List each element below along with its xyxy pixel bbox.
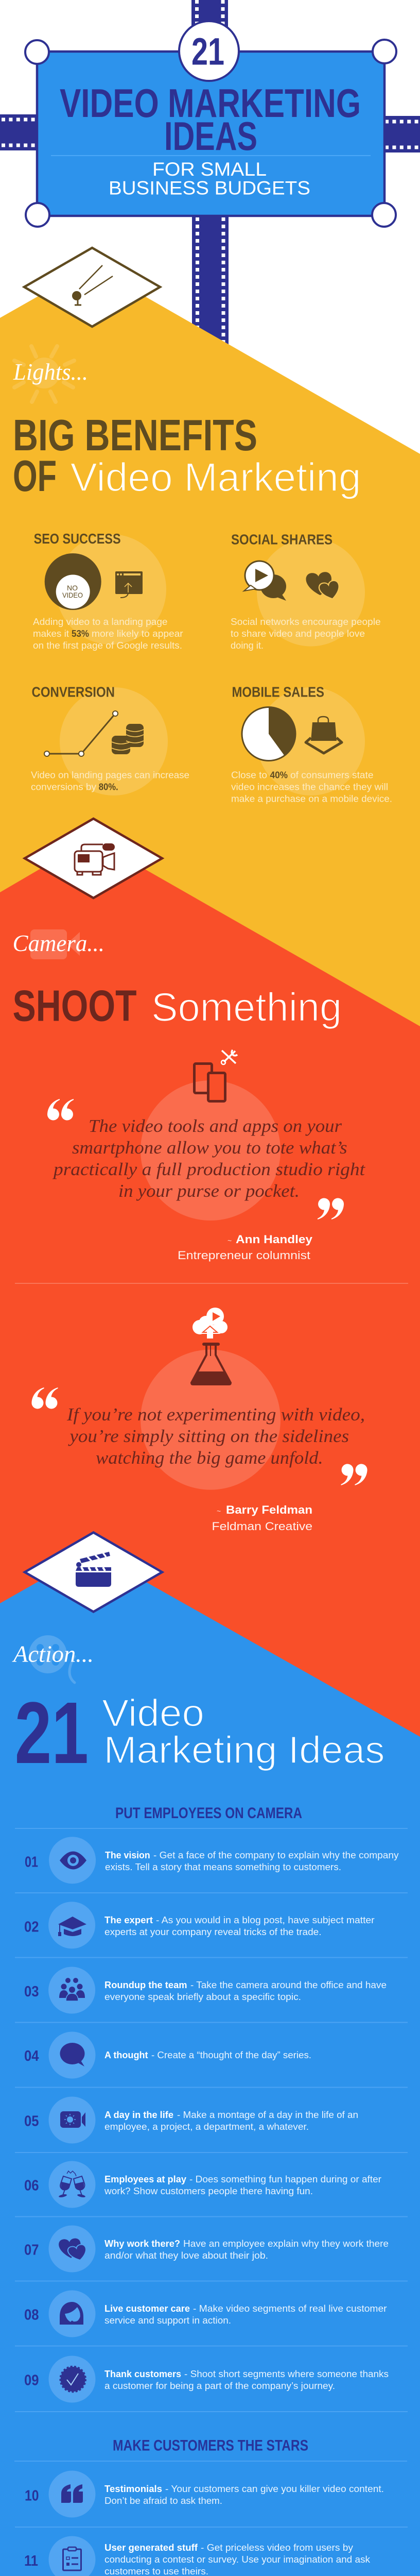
section label: Lights: Lights... xyxy=(13,359,88,385)
idea 03: - Take the camera around the office and have xyxy=(190,1980,387,1990)
icon: lab flask xyxy=(190,1343,232,1385)
idea 07: Why work there? xyxy=(104,2239,180,2249)
idea 09 xyxy=(24,2355,389,2403)
description: video increases the chance they will xyxy=(231,782,388,792)
heading: SOCIAL SHARES xyxy=(231,532,332,548)
idea 04: A thought xyxy=(104,2050,148,2060)
attribution: ~ xyxy=(217,1507,221,1515)
panel: quote by Barry Feldman xyxy=(31,1308,367,1533)
title line two: IDEAS xyxy=(164,113,257,159)
idea 02: experts at your company reveal tricks of the trade. xyxy=(104,1927,321,1937)
heading: 21 video marketing ideas: Video xyxy=(102,1692,204,1734)
subtitle line one: FOR SMALL xyxy=(152,159,267,180)
idea 11: conducting a contest or survey. Use your imagination and ask xyxy=(104,2554,371,2565)
film strip: right xyxy=(381,116,420,152)
idea 02: 02 xyxy=(24,1919,39,1935)
panel: conversion xyxy=(31,684,189,795)
description xyxy=(33,617,183,651)
idea 10: - Your customers can give you killer video content. xyxy=(165,2484,384,2494)
idea 06 xyxy=(24,2161,381,2208)
subheading: put employees on camera: PUT EMPLOYEES ON CAMERA xyxy=(115,1805,302,1822)
idea 02: The expert xyxy=(104,1915,153,1925)
idea 02 xyxy=(24,1902,375,1948)
icon: closing quote mark xyxy=(318,1198,344,1219)
idea 03: 03 xyxy=(24,1984,39,2000)
heading: CONVERSION xyxy=(32,684,115,700)
idea 08: - Make video segments of real live customer xyxy=(193,2303,387,2314)
quote text xyxy=(52,1116,365,1201)
heading: MOBILE SALES xyxy=(232,684,324,700)
icon: video camera with sun xyxy=(60,2111,85,2128)
quote text: you’re simply sitting on the sidelines xyxy=(68,1426,349,1446)
attribution: Feldman Creative xyxy=(212,1520,312,1533)
icon: speech bubble xyxy=(60,2043,84,2066)
description: makes it xyxy=(33,629,69,639)
panel: blue action section xyxy=(0,1551,420,2576)
idea 03 xyxy=(24,1967,387,2013)
film strip: vertical xyxy=(191,0,229,355)
heading: big benefits: BIG BENEFITS xyxy=(13,411,257,460)
icon: video chat bubbles xyxy=(244,561,286,601)
idea 03: everyone speak briefly about a specific topic. xyxy=(104,1992,301,2002)
description xyxy=(231,770,392,804)
idea 10: 10 xyxy=(25,2488,39,2504)
attribution xyxy=(178,1233,313,1262)
title number: 21 xyxy=(191,30,224,73)
quote text: smartphone allow you to tote what’s xyxy=(72,1138,347,1158)
idea 11 xyxy=(24,2536,371,2576)
icon: hearts xyxy=(58,2238,89,2262)
icon: pie chart 40 percent xyxy=(242,707,295,760)
quote text: If you’re not experimenting with video, xyxy=(66,1404,365,1425)
description: Close to xyxy=(231,770,267,781)
icon: hearts xyxy=(305,571,342,601)
subheading: make customers the stars: MAKE CUSTOMERS THE STARS xyxy=(113,2437,308,2454)
idea 09: - Shoot short segments where someone thanks xyxy=(184,2369,389,2379)
icon: cloud video upload xyxy=(192,1308,227,1338)
icon: opening quote mark xyxy=(47,1099,74,1120)
idea 11: - Get priceless video from users by xyxy=(201,2543,353,2553)
subtitle line two: BUSINESS BUDGETS xyxy=(109,177,310,199)
icon: light stand diamond xyxy=(24,248,160,327)
attribution: Entrepreneur columnist xyxy=(178,1249,310,1262)
heading: 21 video marketing ideas: Marketing Ideas xyxy=(104,1728,385,1771)
idea 05: A day in the life xyxy=(104,2110,173,2120)
idea 02: - As you would in a blog post, have subject matter xyxy=(156,1915,375,1925)
idea 04: 04 xyxy=(24,2048,39,2064)
panel: orange camera section xyxy=(0,839,420,1741)
icon: coin stacks xyxy=(112,724,144,754)
idea 09: 09 xyxy=(24,2372,39,2389)
idea 08: Live customer care xyxy=(104,2303,190,2314)
idea 07: and/or what they love about their job. xyxy=(104,2250,268,2261)
idea 05: employee, a project, a department, a whatever. xyxy=(104,2122,309,2132)
quote text: in your purse or pocket. xyxy=(118,1181,300,1201)
heading: big benefits: Video Marketing xyxy=(70,454,361,500)
icon: browser upload xyxy=(115,571,143,598)
quote text: practically a full production studio right xyxy=(52,1159,365,1179)
quote text: watching the big game unfold. xyxy=(96,1448,323,1468)
idea 09: a customer for being a part of the company’s journey. xyxy=(104,2381,335,2391)
heading: SEO SUCCESS xyxy=(34,531,121,547)
description xyxy=(231,617,381,651)
idea 11: 11 xyxy=(24,2553,38,2569)
description: of consumers state xyxy=(290,770,374,781)
attribution: ~ xyxy=(227,1236,232,1245)
icon: rising line chart xyxy=(44,711,118,756)
idea 08: 08 xyxy=(24,2307,39,2324)
idea 05: 05 xyxy=(24,2113,39,2130)
idea 06: work? Show customers people there having fun. xyxy=(104,2186,313,2196)
panel: social shares xyxy=(231,532,381,651)
icon: graduation cap xyxy=(58,1917,86,1936)
section label: Action: Action... xyxy=(12,1640,94,1667)
icon: no video circle xyxy=(45,553,101,610)
section label: Camera: Camera... xyxy=(12,930,104,956)
heading: big benefits xyxy=(13,411,361,501)
attribution: Barry Feldman xyxy=(226,1503,312,1516)
quote text xyxy=(66,1404,365,1468)
idea 07 xyxy=(24,2226,389,2272)
heading: shoot something: SHOOT xyxy=(12,982,137,1031)
idea 04: - Create a “thought of the day” series. xyxy=(151,2050,311,2060)
quote text: The video tools and apps on your xyxy=(89,1116,342,1136)
idea 05 xyxy=(24,2097,358,2143)
attribution: Ann Handley xyxy=(236,1233,313,1246)
heading: shoot something xyxy=(12,982,342,1031)
icon: team xyxy=(59,1978,85,2001)
idea 05: - Make a montage of a day in the life of an xyxy=(177,2110,358,2120)
icon: tools xyxy=(221,1050,237,1064)
description: doing it. xyxy=(231,640,264,651)
icon: smartphones xyxy=(195,1063,225,1101)
description: to share video and people love xyxy=(231,629,365,639)
icon: no video circle: VIDEO xyxy=(62,591,83,599)
icon: camcorder diamond xyxy=(25,819,162,898)
idea 01: exists. Tell a story that means something to customers. xyxy=(105,1862,341,1872)
description xyxy=(31,770,189,792)
panel: quote by Ann Handley xyxy=(47,1050,365,1262)
icon: clapperboard diamond xyxy=(25,1532,162,1612)
film strip: left xyxy=(0,114,41,150)
icon: eye xyxy=(60,1852,86,1869)
icon: clipboard xyxy=(63,2547,81,2570)
idea 10: Don’t be afraid to ask them. xyxy=(104,2496,222,2506)
idea 04 xyxy=(24,2032,311,2078)
idea 07: Have an employee explain why they work there xyxy=(183,2239,389,2249)
idea 01 xyxy=(25,1837,398,1884)
idea 06: Employees at play xyxy=(104,2174,186,2184)
icon: film reel behind Action xyxy=(29,1635,75,1683)
icon: camera behind Camera label xyxy=(30,929,80,959)
description: Video on landing pages can increase xyxy=(31,770,189,781)
idea 08: service and support in action. xyxy=(104,2315,231,2326)
idea 07: 07 xyxy=(24,2242,39,2259)
idea 10: Testimonials xyxy=(104,2484,162,2494)
icon: customer care agent xyxy=(60,2302,83,2325)
panel: yellow lights section xyxy=(0,266,420,1030)
idea 08 xyxy=(24,2291,387,2337)
idea 09: Thank customers xyxy=(104,2369,181,2379)
idea 10 xyxy=(25,2471,384,2517)
description: conversions by xyxy=(31,782,96,792)
description: 80%. xyxy=(99,782,118,792)
attribution xyxy=(212,1503,312,1533)
icon: shopping bag xyxy=(306,717,342,753)
description: Adding video to a landing page xyxy=(33,617,168,627)
icon: sun behind Lights xyxy=(14,346,74,402)
icon: quotation blocks xyxy=(61,2484,83,2503)
idea 06: 06 xyxy=(24,2177,39,2194)
idea 01: The vision xyxy=(105,1850,150,1860)
heading: 21 video marketing ideas: 21 xyxy=(15,1684,89,1782)
panel: mobile sales xyxy=(231,684,392,804)
heading: shoot something: Something xyxy=(151,985,342,1030)
idea 06: - Does something fun happen during or after xyxy=(189,2174,381,2184)
description: make a purchase on a mobile device. xyxy=(231,794,392,804)
idea 03: Roundup the team xyxy=(104,1980,187,1990)
title sign panel xyxy=(25,21,396,227)
icon: champagne glasses xyxy=(59,2171,85,2198)
idea 01: - Get a face of the company to explain why the company xyxy=(153,1850,398,1860)
idea 11: User generated stuff xyxy=(104,2543,198,2553)
icon: closing quote mark xyxy=(341,1464,367,1485)
heading: 21 video marketing ideas xyxy=(15,1684,385,1782)
idea 01: 01 xyxy=(25,1854,38,1870)
description: on the first page of Google results. xyxy=(33,640,182,651)
description: 40% xyxy=(270,770,288,781)
heading: big benefits: OF xyxy=(13,452,57,501)
panel: SEO success xyxy=(33,531,183,651)
description: Social networks encourage people xyxy=(231,617,381,627)
icon: opening quote mark xyxy=(31,1387,58,1409)
description: more likely to appear xyxy=(92,629,183,639)
icon: no video circle: NO xyxy=(67,584,78,592)
description: 53% xyxy=(72,629,89,639)
icon: badge check xyxy=(60,2366,86,2392)
